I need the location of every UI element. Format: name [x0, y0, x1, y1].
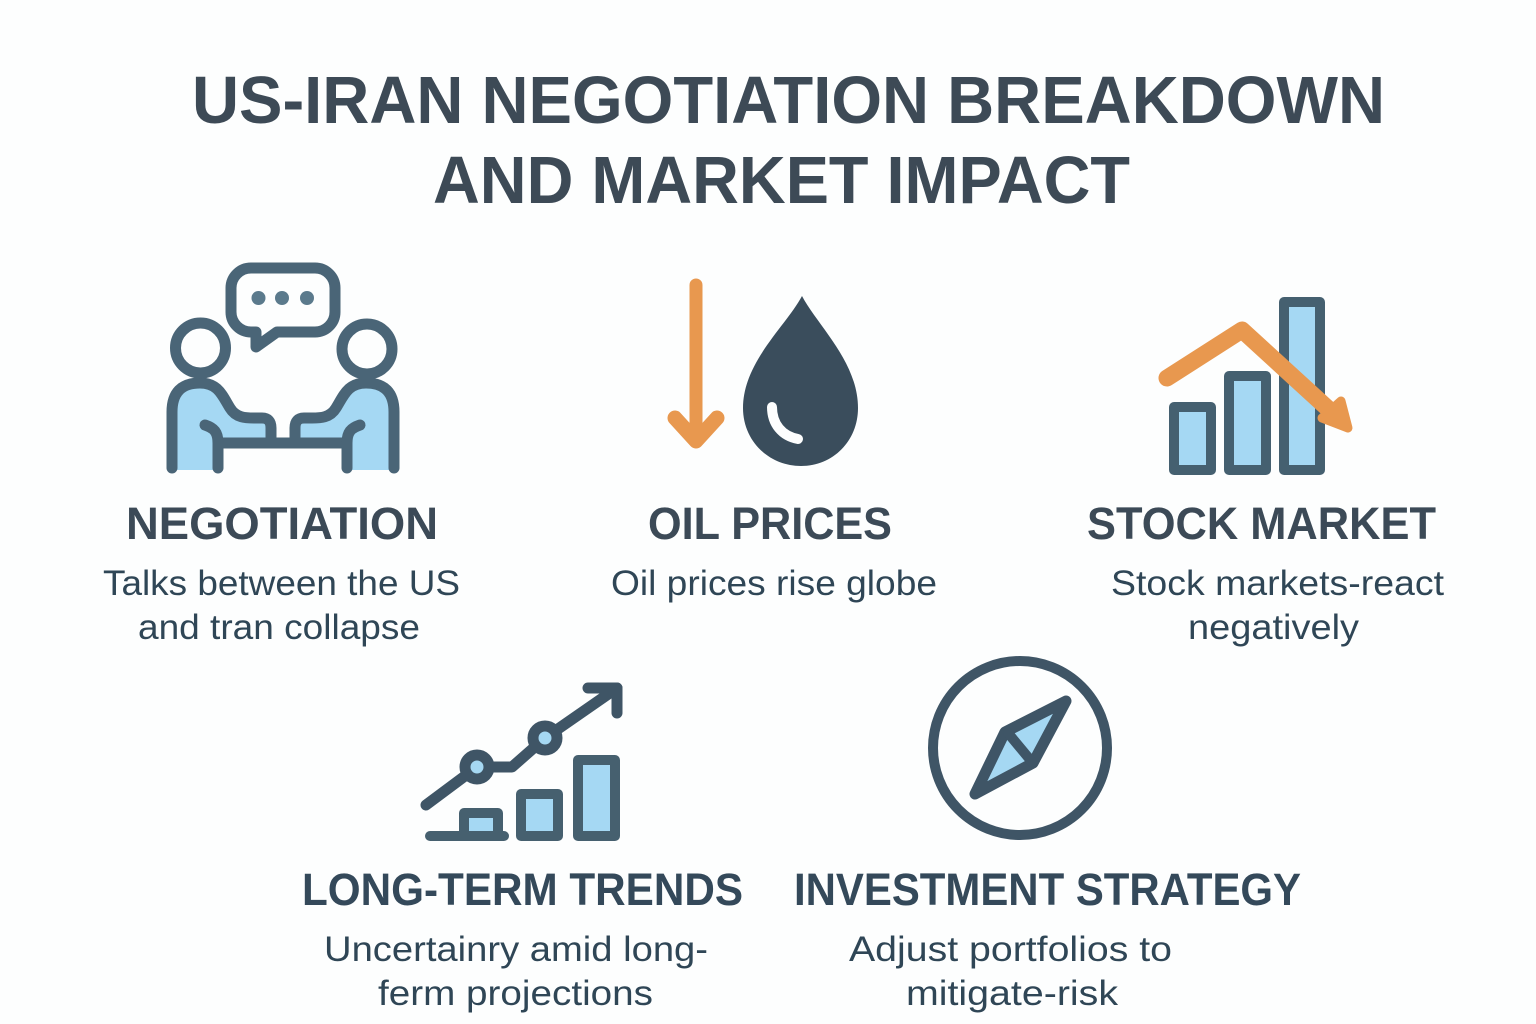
text: long-term trends description: ferm projections	[378, 974, 653, 1013]
panel: investment strategy	[794, 661, 1301, 1013]
text: negotiation description: and tran collapse	[138, 608, 420, 647]
text: long-term trends description: Uncertainry amid long-	[324, 930, 708, 969]
panel: long-term trends	[302, 688, 743, 1013]
heading: negotiation: NEGOTIATION	[126, 498, 438, 549]
panel: oil prices	[611, 285, 937, 603]
text: negotiation description	[103, 564, 460, 647]
title: AND MARKET IMPACT	[433, 143, 1130, 218]
heading: oil prices: OIL PRICES	[648, 498, 892, 549]
text: stock market description: negatively	[1188, 608, 1360, 647]
text: oil prices description: Oil prices rise globe	[611, 564, 937, 603]
panel: stock market	[1087, 302, 1444, 647]
icon: rising line and bars	[426, 688, 617, 836]
title: US-IRAN NEGOTIATION BREAKDOWN	[192, 63, 1385, 138]
text: stock market description: Stock markets-react	[1111, 564, 1444, 603]
text: long-term trends description	[324, 930, 708, 1013]
text: investment strategy description: Adjust portfolios to	[849, 930, 1172, 969]
icon: compass	[933, 661, 1107, 835]
text: negotiation description: Talks between the US	[103, 564, 460, 603]
icon: down arrow	[675, 285, 717, 441]
text: stock market description	[1111, 564, 1444, 647]
text: investment strategy description	[849, 930, 1172, 1013]
icon: bars with falling arrow	[1167, 302, 1348, 470]
heading: investment strategy: INVESTMENT STRATEGY	[794, 864, 1301, 915]
heading: long-term trends: LONG-TERM TRENDS	[302, 864, 743, 915]
heading: stock market: STOCK MARKET	[1087, 498, 1436, 549]
text: investment strategy description: mitigate-risk	[906, 974, 1119, 1013]
icon: two people talking at a table	[172, 268, 394, 470]
panel: negotiation	[103, 268, 460, 647]
icon: oil drop	[743, 296, 858, 466]
title	[192, 63, 1385, 218]
